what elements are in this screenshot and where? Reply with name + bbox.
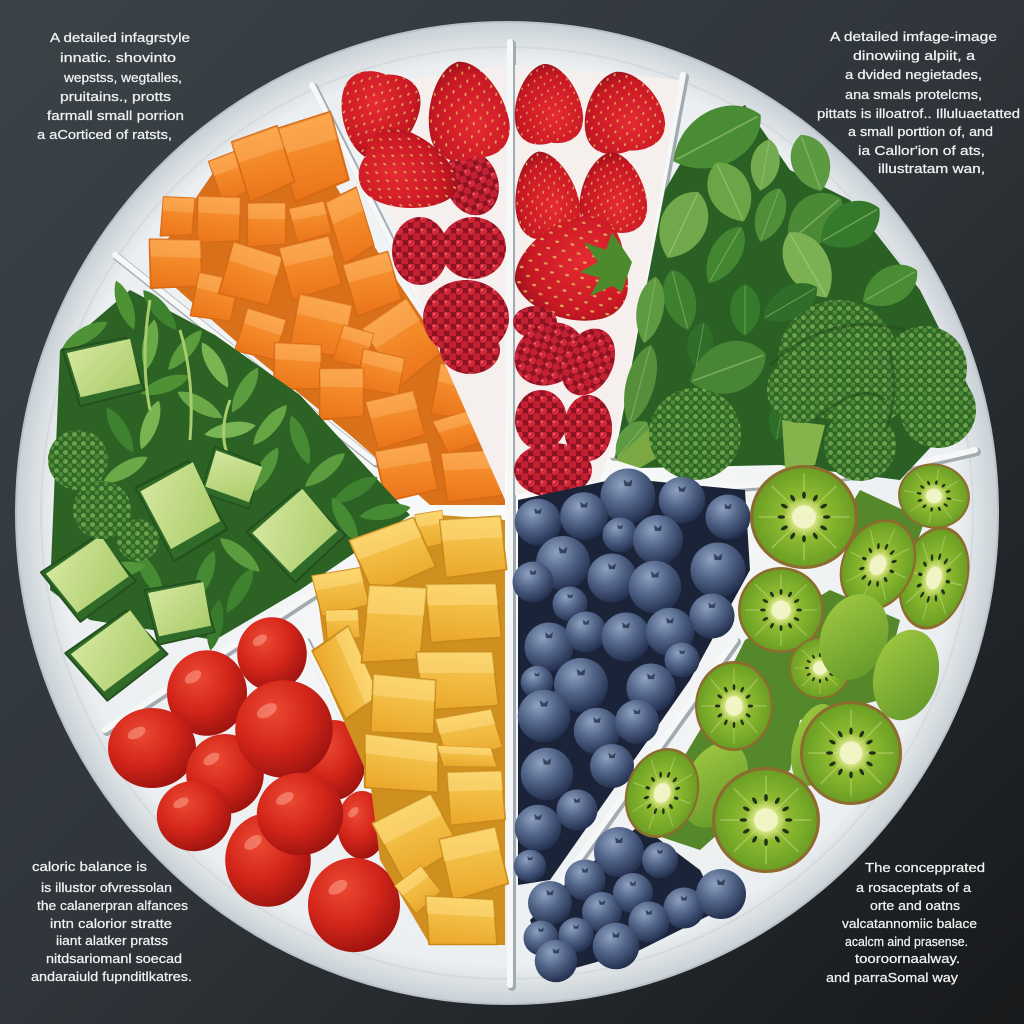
section: strawberries and raspberries — [332, 55, 515, 500]
arugula — [59, 278, 412, 652]
text: top left note: wepstss, wegtalles, — [63, 70, 182, 85]
text: top left note: innatic. shovinto — [60, 50, 176, 65]
text: top left note: pruitains., protts — [60, 89, 172, 104]
text: bottom right note: a rosaceptats of a — [856, 880, 972, 895]
cucumbers — [39, 336, 350, 706]
text: bottom left note: andaraiuld fupnditlkatres. — [31, 969, 192, 984]
text: bottom left note: caloric balance is — [32, 859, 148, 874]
text: bottom right note: valcatannomiic balace — [842, 916, 977, 931]
text: bottom right note — [826, 860, 985, 985]
raspberries right — [503, 306, 625, 497]
text: bottom left note: nitdsariomanl soecad — [46, 951, 182, 966]
text: bottom left note: the calanerpran alfances — [37, 898, 189, 913]
raspberries left — [392, 143, 509, 374]
large strawberry — [506, 210, 634, 333]
text: top left note — [37, 30, 190, 142]
section: orange vegetable cubes — [143, 111, 505, 505]
section: strawberries and raspberries right — [503, 61, 680, 497]
text: top right note: ia Callor'ion of ats, — [858, 143, 985, 158]
text: bottom right note: The concepprated — [865, 860, 985, 875]
text: bottom right note: and parraSomal way — [826, 970, 959, 985]
text: top right note — [817, 29, 1020, 176]
text: bottom right note: tooroornaalway. — [855, 951, 960, 966]
text: top left note: a aCorticed of ratsts, — [37, 127, 172, 142]
text: top left note: farmall small porrion — [47, 108, 184, 123]
text: top right note: illustratam wan, — [878, 161, 985, 176]
broccoli small — [615, 388, 741, 480]
text: bottom left note: intn calorior stratte — [50, 916, 172, 931]
section: yellow mango chunks — [308, 510, 510, 954]
section: leafy greens and broccoli — [607, 90, 976, 481]
section: cherry tomatoes — [108, 617, 400, 952]
strawberries left — [332, 55, 515, 226]
section: leafy greens and cucumber — [39, 278, 412, 706]
text: top right note: A detailed imfage-image — [830, 29, 997, 44]
text: top right note: dinowiing alpiit, a — [853, 48, 976, 63]
text: top right note: ana smals protelcms, — [845, 87, 982, 102]
text: bottom right note: acalcm aind prasense. — [845, 934, 968, 949]
broccoli large — [767, 300, 976, 481]
section: blueberries — [512, 468, 750, 982]
text: top left note: A detailed infagrstyle — [50, 30, 190, 45]
text: bottom left note — [31, 859, 192, 984]
text: bottom left note: is illustor ofvressolan — [41, 880, 172, 895]
spinach leaves — [607, 90, 926, 467]
text: top right note: a dvided negietades, — [845, 67, 982, 82]
text: bottom left note: iiant alatker pratss — [56, 933, 169, 948]
text: top right note: pittats is illoatrof.. Illuluaetatted — [817, 106, 1020, 121]
plate dividers — [105, 42, 977, 987]
broccoli florets — [48, 430, 159, 561]
text: bottom right note: orte and oatns — [870, 898, 961, 913]
section: kiwi slices — [612, 458, 980, 873]
text: top right note: a small porttion of, and — [848, 124, 993, 139]
